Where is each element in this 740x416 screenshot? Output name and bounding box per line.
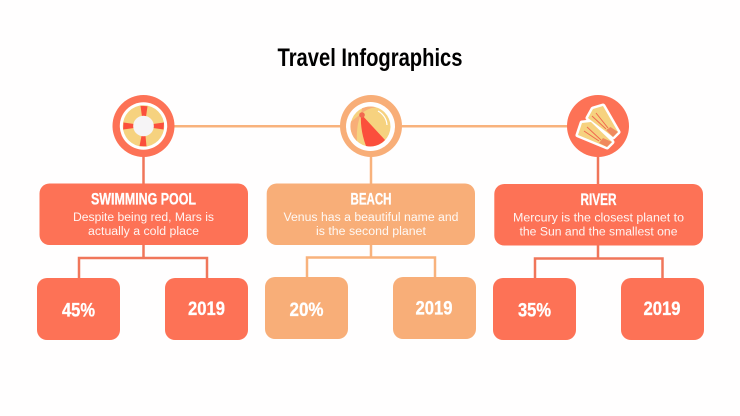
text: beach description: is the second planet — [316, 226, 427, 238]
title: Travel Infographics — [278, 44, 462, 72]
stat card: 2019 — [393, 277, 476, 339]
connectors: swimming pool — [79, 156, 207, 278]
column: swimming pool — [37, 95, 248, 340]
stat card: 2019 — [621, 278, 704, 340]
heading: beach: BEACH — [350, 189, 392, 208]
header card: river — [494, 184, 703, 246]
text: swimming pool description: actually a cold place — [88, 226, 199, 238]
text: river description — [513, 212, 684, 238]
header card: beach — [267, 184, 475, 245]
icon: beach ball — [340, 95, 402, 157]
timeline connector — [174, 125, 568, 128]
icon: life ring — [112, 95, 174, 157]
stat card: 2019: 2019 — [644, 298, 681, 320]
heading: river: RIVER — [580, 190, 616, 209]
stat card: 45%: 45% — [62, 300, 95, 322]
stat card: 2019: 2019 — [188, 298, 225, 320]
stat card: 35%: 35% — [518, 300, 551, 322]
stat card: 2019: 2019 — [416, 298, 453, 320]
heading: swimming pool: SWIMMING POOL — [91, 189, 196, 208]
connectors: beach — [307, 156, 435, 277]
header card: swimming pool — [40, 184, 248, 245]
stat card: 2019 — [165, 278, 248, 340]
icon: swim fins — [567, 95, 629, 157]
text: swimming pool description — [73, 212, 214, 238]
text: river description: the Sun and the smallest one — [520, 226, 678, 238]
stat card: 45% — [37, 278, 120, 340]
connectors: river — [535, 156, 662, 278]
text: beach description — [284, 212, 458, 238]
stat card: 35% — [493, 278, 576, 340]
text: beach description: Venus has a beautiful name and — [284, 212, 458, 224]
stat card: 20% — [265, 277, 348, 339]
text: swimming pool description: Despite being red, Mars is — [73, 212, 214, 224]
column: river — [493, 95, 704, 340]
column: beach — [265, 95, 476, 339]
text: river description: Mercury is the closest planet to — [513, 212, 684, 224]
stat card: 20%: 20% — [290, 299, 324, 321]
